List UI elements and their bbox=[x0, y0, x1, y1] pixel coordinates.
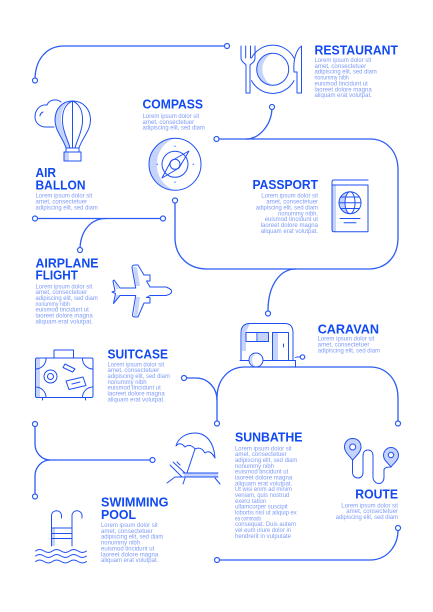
text: sunbathe body: ea commodo bbox=[235, 516, 261, 522]
text: suitcase body: laoreet dolore magna bbox=[108, 392, 165, 398]
text: passport body: aliquam erat volutpat. bbox=[261, 229, 318, 235]
text: caravan body: amet, consectetuer bbox=[318, 343, 369, 349]
text: caravan body: Lorem ipsum dolor sit bbox=[318, 337, 375, 343]
text: suitcase body bbox=[108, 362, 170, 403]
text: restaurant body: Lorem ipsum dolor sit bbox=[314, 58, 372, 64]
text: swimming body: Lorem ipsum dolor sit bbox=[101, 523, 158, 529]
heading: air ballon: BALLON bbox=[36, 178, 86, 192]
text: sunbathe body: exerci tation bbox=[235, 499, 266, 505]
text: swimming body: euismod tincidunt ut bbox=[101, 546, 155, 552]
text: swimming body: laoreet dolore magna bbox=[101, 552, 159, 558]
icon: compass bbox=[149, 138, 201, 190]
text: restaurant body: adipiscing elit, sed diam bbox=[314, 70, 377, 76]
connector: caravan arch bbox=[182, 367, 400, 426]
text: swimming body: aliquam erat volutpat. bbox=[101, 558, 159, 564]
text: sunbathe body bbox=[235, 446, 297, 540]
text: air ballon body: amet, consectetuer bbox=[36, 200, 87, 206]
text: restaurant body: euismod tincidunt ut bbox=[314, 81, 368, 87]
text: sunbathe body: ullamcorper suscipit bbox=[235, 505, 288, 511]
text: route body: adipiscing elit, sed diam bbox=[336, 515, 398, 521]
text: suitcase body: euismod tincidunt ut bbox=[108, 386, 161, 392]
text: airplane body: amet, consectetuer bbox=[36, 290, 87, 296]
text: sunbathe body: veniam, quis nostrud bbox=[235, 493, 289, 499]
heading: suitcase: SUITCASE bbox=[108, 347, 168, 362]
text: restaurant body bbox=[314, 58, 377, 99]
text: restaurant body: aliquam erat volutpat. bbox=[314, 93, 372, 99]
text: passport body bbox=[256, 194, 319, 235]
icon: swimming pool ladder bbox=[36, 511, 86, 563]
text: compass body: amet, consectetuer bbox=[142, 120, 194, 126]
heading: swimming pool: POOL bbox=[101, 507, 136, 522]
text: swimming body: nonummy nibh bbox=[101, 541, 140, 547]
text: passport body: adipiscing elit, sed diam bbox=[256, 205, 318, 211]
text: sunbathe body: laoreet dolore magna bbox=[235, 476, 293, 482]
connector: passport loop bbox=[172, 104, 398, 269]
text: airplane body: adipiscing elit, sed diam bbox=[36, 296, 98, 302]
text: sunbathe body: amet, consectetuer bbox=[235, 452, 287, 458]
text: swimming body bbox=[101, 523, 163, 564]
text: suitcase body: adipiscing elit, sed diam bbox=[108, 374, 170, 380]
text: restaurant body: amet, consectetuer bbox=[314, 64, 366, 70]
text: air ballon body: Lorem ipsum dolor sit bbox=[36, 194, 93, 200]
connector: bottom line bbox=[214, 526, 400, 562]
text: airplane body: Lorem ipsum dolor sit bbox=[36, 284, 93, 290]
text: route body: Lorem ipsum dolor sit bbox=[341, 503, 398, 509]
text: sunbathe body: euismod tincidunt ut bbox=[235, 470, 289, 476]
text: sunbathe body: vel eum iriure dolor in bbox=[235, 528, 291, 534]
text: caravan body bbox=[318, 337, 380, 354]
text: route body: amet, consectetuer bbox=[346, 509, 398, 515]
heading: air ballon: AIR bbox=[36, 165, 57, 180]
heading: sunbathe: SUNBATHE bbox=[235, 430, 303, 445]
heading: airplane flight bbox=[36, 256, 99, 283]
heading: airplane flight: FLIGHT bbox=[36, 268, 78, 283]
heading: air ballon bbox=[36, 165, 86, 192]
heading: restaurant: RESTAURANT bbox=[314, 42, 398, 57]
connector: swimming fork bbox=[32, 422, 155, 499]
heading: swimming pool bbox=[101, 495, 168, 522]
heading: swimming pool: SWIMMING bbox=[101, 495, 168, 510]
text: restaurant body: laoreet dolore magna bbox=[314, 87, 372, 93]
text: airplane body: nonummy nibh bbox=[36, 302, 70, 308]
text: sunbathe body: nonummy nibh bbox=[235, 464, 274, 470]
text: passport body: Lorem ipsum dolor sit bbox=[261, 194, 318, 200]
connector: airplane branch bbox=[32, 216, 166, 252]
text: passport body: amet, consectetuer bbox=[266, 200, 318, 206]
text: sunbathe body: adipiscing elit, sed diam bbox=[235, 458, 297, 464]
text: airplane body bbox=[36, 284, 98, 325]
icon: beach umbrella and lounger bbox=[167, 433, 220, 484]
text: sunbathe body: aliquam erat volutpat. bbox=[235, 481, 293, 487]
heading: caravan: CARAVAN bbox=[318, 322, 379, 337]
text: airplane body: laoreet dolore magna bbox=[36, 314, 93, 320]
text: passport body: laoreet dolore magna bbox=[261, 223, 319, 229]
text: sunbathe body: lobortis nisl ut aliquip ex bbox=[235, 510, 297, 516]
text: sunbathe body: Lorem ipsum dolor sit bbox=[235, 446, 292, 452]
text: sunbathe body: hendrerit in vulputate bbox=[235, 534, 292, 540]
icon: hot air balloon with cloud bbox=[35, 100, 90, 161]
icon: route pins bbox=[344, 438, 398, 484]
heading: compass: COMPASS bbox=[142, 96, 203, 112]
heading: route: ROUTE bbox=[355, 487, 398, 502]
text: compass body: Lorem ipsum dolor sit bbox=[142, 114, 200, 120]
text: airplane body: euismod tincidunt ut bbox=[36, 308, 89, 314]
text: sunbathe body: consequat. Duis autem bbox=[235, 522, 296, 528]
text: route body bbox=[336, 503, 398, 521]
text: air ballon body bbox=[36, 194, 98, 211]
icon: airplane bbox=[112, 265, 172, 317]
icon: caravan bbox=[240, 324, 305, 367]
icon: fork and plate bbox=[241, 45, 302, 93]
icon: passport bbox=[332, 180, 368, 232]
text: swimming body: amet, consectetuer bbox=[101, 529, 153, 535]
connector: top line bbox=[32, 44, 230, 83]
text: passport body: euismod tincidunt ut bbox=[265, 217, 318, 223]
heading: passport: PASSPORT bbox=[252, 177, 318, 192]
text: suitcase body: Lorem ipsum dolor sit bbox=[108, 362, 165, 368]
connector: caravan branch bbox=[266, 269, 296, 316]
text: restaurant body: nonummy nibh bbox=[314, 76, 349, 82]
heading: airplane flight: AIRPLANE bbox=[36, 256, 99, 271]
text: sunbathe body: Ut wisi enim ad minim bbox=[235, 487, 292, 493]
text: compass body: adipiscing elit, sed diam bbox=[142, 126, 205, 132]
text: caravan body: adipiscing elit, sed diam bbox=[318, 348, 380, 354]
text: swimming body: adipiscing elit, sed diam bbox=[101, 535, 163, 541]
text: suitcase body: nonummy nibh bbox=[108, 380, 146, 386]
text: air ballon body: adipiscing elit, sed diam bbox=[36, 205, 98, 211]
text: suitcase body: amet, consectetuer bbox=[108, 368, 159, 374]
text: airplane body: aliquam erat volutpat. bbox=[36, 319, 93, 325]
text: suitcase body: aliquam erat volutpat. bbox=[108, 397, 165, 403]
text: passport body: nonummy nibh. bbox=[278, 211, 318, 217]
text: compass body bbox=[142, 114, 205, 132]
icon: suitcase bbox=[36, 350, 93, 400]
